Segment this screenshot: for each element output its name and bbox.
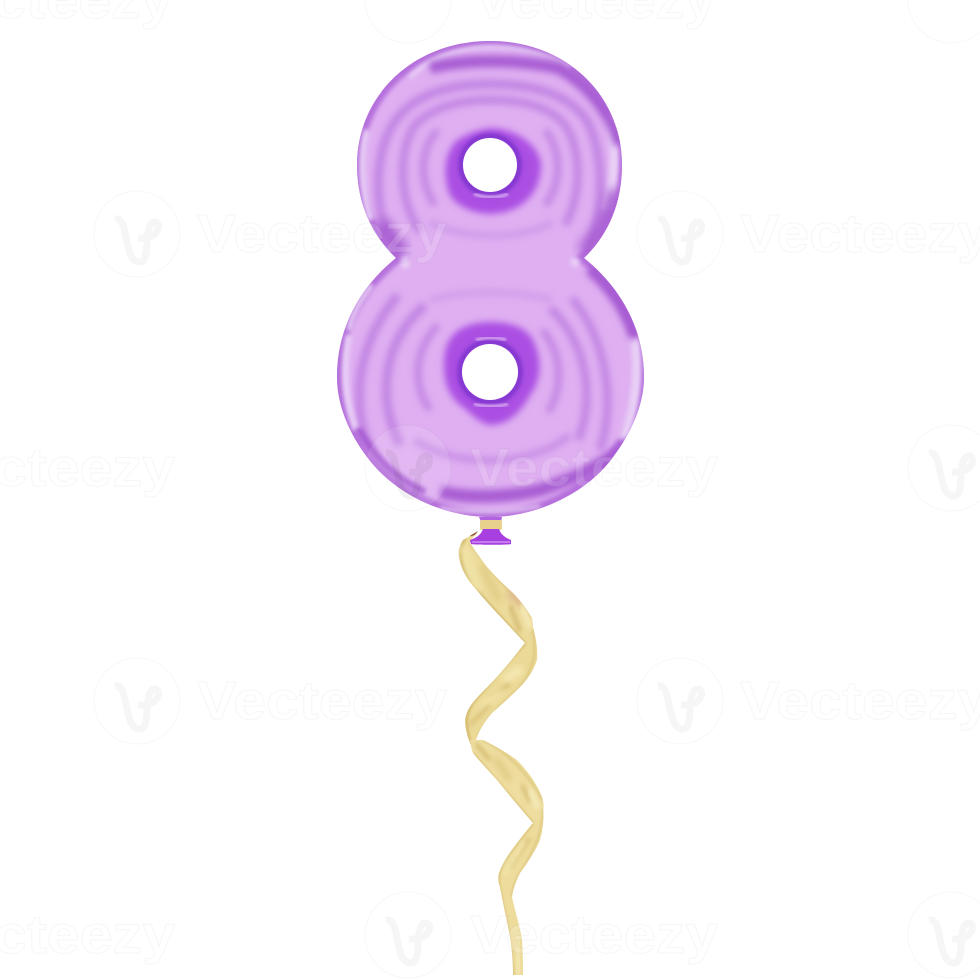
ribbon [458,531,544,975]
ribbon: tail [498,808,544,975]
neck: rim highlight [472,541,510,543]
upper hole halo [445,128,541,214]
watermark row 5 [0,892,980,978]
ribbon: third twist [470,740,544,823]
watermark row 2 [94,191,980,277]
watermark row 5: Vecteezy [470,905,718,965]
neck: flare [470,529,511,545]
watermark row 3: Vecteezy [470,438,718,498]
watermark row 4 [94,658,980,744]
balloon body [330,35,650,525]
light edge highlights [345,47,637,512]
lower hole [462,344,518,400]
neck: purple top [479,517,502,522]
lower hole halo [444,322,539,425]
watermark row 4: Vecteezy [740,671,980,731]
watermark row 2: Vecteezy [197,204,447,264]
watermark row 1 [0,0,980,43]
watermark row 3 [0,425,980,511]
lower lobe concentric rings [359,292,607,460]
neck: gold collar [480,520,502,530]
watermark row 2: Vecteezy [740,204,980,264]
balloon digit 8 [330,35,650,525]
edge shading [337,41,644,517]
upper hole [463,138,517,192]
dark shading bands [358,61,636,496]
balloon neck [470,517,511,545]
ribbon: first twist [458,531,533,643]
watermark row 4: Vecteezy [197,671,447,731]
upper lobe concentric rings [378,84,600,250]
ribbon: second twist [465,627,538,746]
